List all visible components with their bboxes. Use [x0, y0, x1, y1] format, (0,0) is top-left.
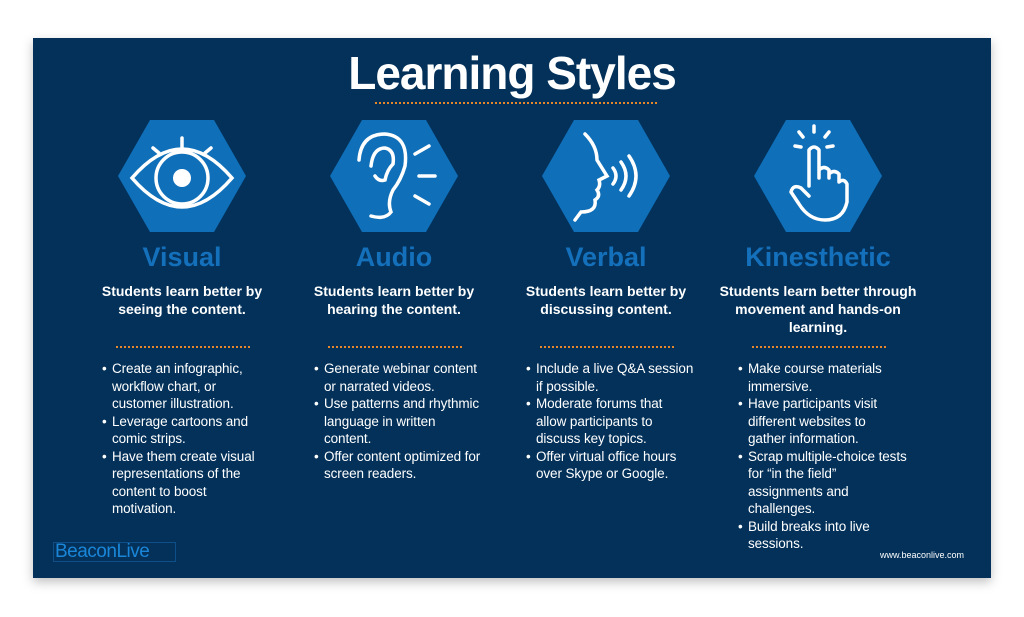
- list: Scrap multiple-choice tests: [748, 448, 907, 464]
- text: description: movement and hands-on: [735, 301, 901, 317]
- icon: speaking head: [542, 120, 670, 232]
- panel: verbal: [526, 120, 693, 481]
- logo: BeaconLive: BeaconLive: [55, 541, 149, 562]
- list: Moderate forums that allow participants to discuss key topics.: [536, 396, 662, 446]
- list: assignments and: [748, 484, 849, 498]
- list: challenges.: [748, 501, 815, 516]
- text: description: Students learn better by: [526, 283, 686, 299]
- list: Generate webinar content or narrated videos.: [324, 361, 477, 394]
- text: description: Students learn better through: [720, 283, 916, 299]
- list: Build breaks into live: [748, 518, 870, 534]
- text: description: discussing content.: [540, 301, 672, 317]
- list: Leverage cartoons and comic strips.: [112, 414, 248, 446]
- heading: Verbal: [565, 242, 647, 272]
- panel: audio: [314, 120, 480, 481]
- heading: Kinesthetic: [745, 242, 891, 272]
- text: description: [720, 283, 916, 335]
- text: url: www.beaconlive.com: [880, 550, 964, 560]
- list: Offer virtual office hours over Skype or Google.: [536, 448, 676, 481]
- text: description: Students learn better by: [102, 283, 262, 299]
- list: different websites to: [748, 414, 866, 428]
- icon: pointing hand: [754, 120, 882, 232]
- list: [102, 361, 255, 516]
- list: [314, 361, 480, 481]
- list: Create an infographic, workflow chart, or customer illustration.: [112, 361, 243, 411]
- list: [526, 361, 693, 481]
- text: description: hearing the content.: [327, 301, 461, 317]
- text: description: seeing the content.: [118, 301, 246, 317]
- icon: eye: [118, 120, 246, 232]
- list: Have them create visual representations of the content to boost motivation.: [112, 448, 255, 516]
- heading: Visual: [142, 242, 222, 272]
- title: Learning Styles: [348, 47, 676, 99]
- list: Include a live Q&A session if possible.: [536, 361, 693, 394]
- heading: Audio: [356, 242, 432, 272]
- list: immersive.: [748, 378, 812, 394]
- text: description: [526, 283, 686, 317]
- icon: ear: [330, 120, 458, 232]
- list: for “in the field”: [748, 466, 836, 481]
- text: description: [314, 283, 474, 317]
- text: description: [102, 283, 262, 317]
- list: Offer content optimized for screen readers.: [324, 448, 480, 481]
- list: Use patterns and rhythmic language in written content.: [324, 396, 479, 446]
- list: Make course materials: [748, 361, 882, 376]
- text: description: Students learn better by: [314, 283, 474, 299]
- list: gather information.: [748, 431, 859, 446]
- panel: visual: [102, 120, 262, 516]
- list: Have participants visit: [748, 396, 877, 411]
- text: description: learning.: [789, 319, 847, 335]
- list: sessions.: [748, 536, 803, 551]
- list: [738, 361, 907, 551]
- panel: kinesthetic: [720, 120, 916, 551]
